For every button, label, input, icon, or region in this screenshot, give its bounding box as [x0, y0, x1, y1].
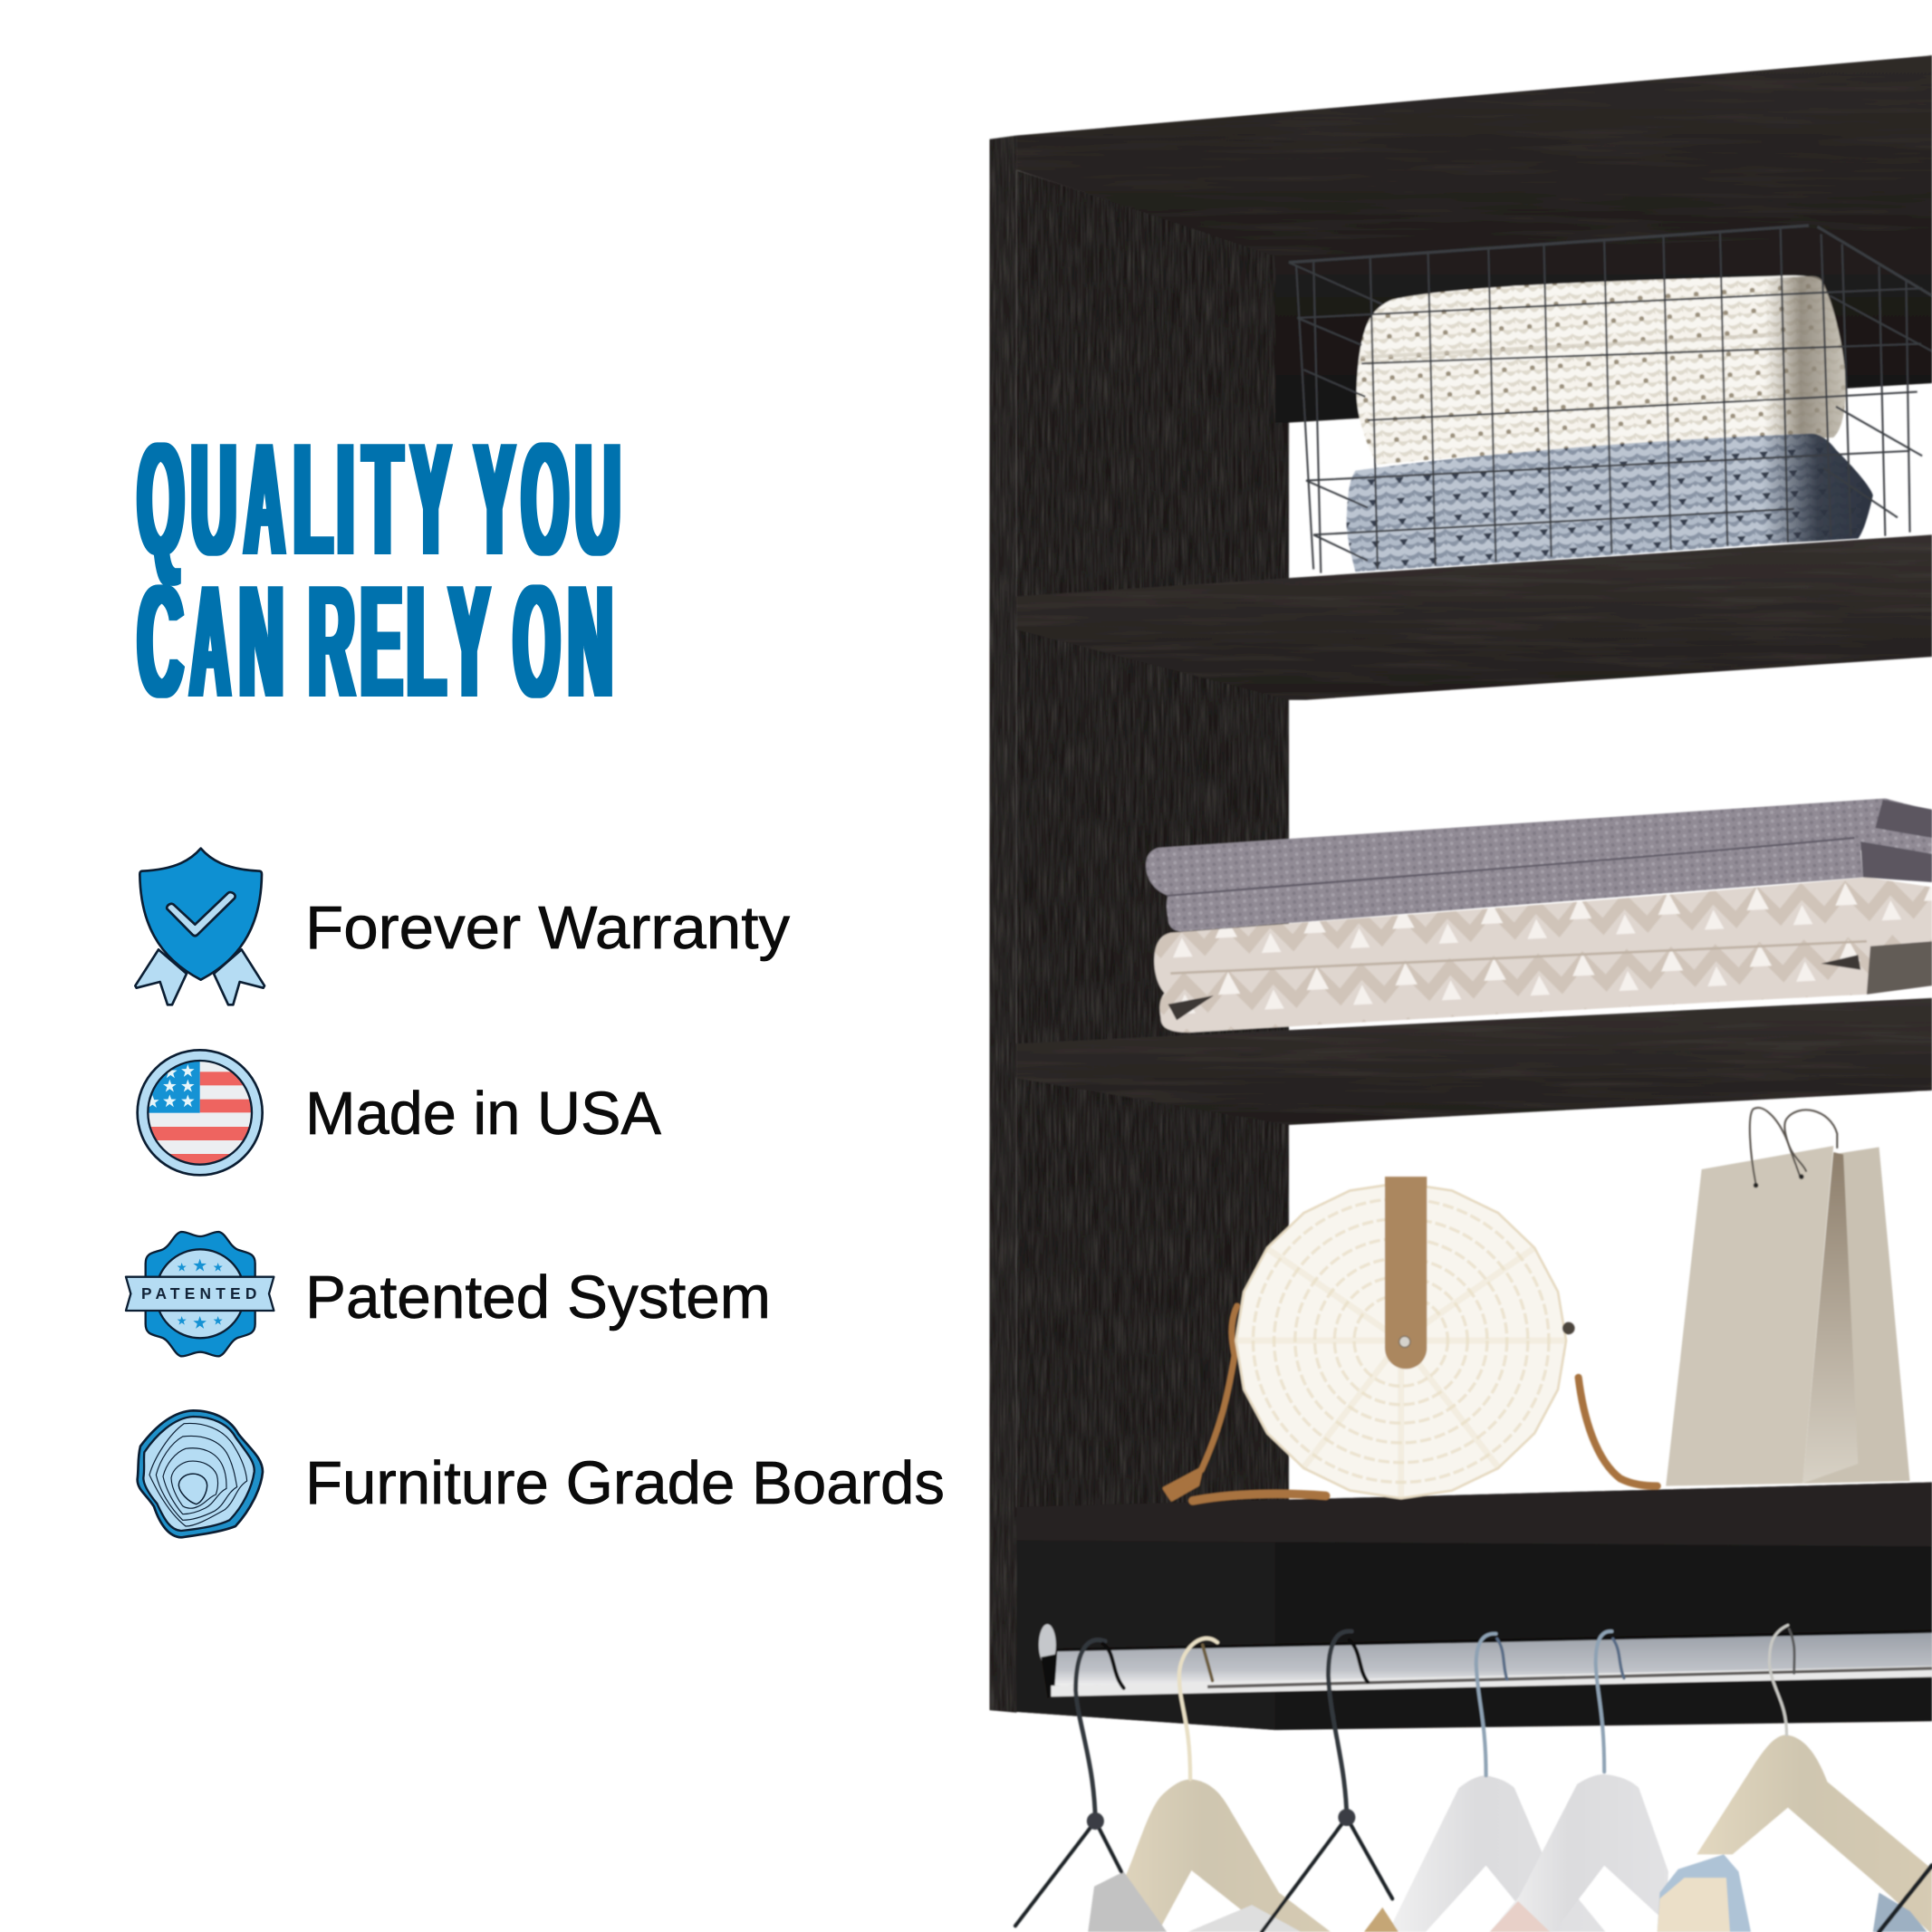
icon: patented badge — [126, 1232, 274, 1356]
knit towel white — [1357, 275, 1846, 465]
black hooks — [1076, 1631, 1368, 1821]
title: L — [293, 409, 332, 589]
text: Forever Warranty: Forever Warranty — [305, 894, 791, 962]
left upright — [989, 136, 1016, 1713]
beige blanket — [1154, 878, 1932, 1033]
title: N — [239, 552, 284, 731]
gray blanket — [1146, 798, 1932, 931]
top board and back rail — [1016, 55, 1932, 423]
title: I — [337, 409, 354, 589]
icon: warranty shield — [135, 849, 264, 1004]
title: O — [514, 552, 560, 731]
title: Y — [411, 409, 449, 589]
wire basket — [1289, 226, 1932, 573]
title: L — [407, 552, 446, 731]
knit towel blue — [1347, 434, 1873, 572]
rivet — [1399, 1336, 1410, 1348]
wicker bag — [1165, 1177, 1658, 1501]
text: Made in USA: Made in USA — [305, 1080, 661, 1148]
blue hooks — [1476, 1631, 1624, 1775]
title: E — [360, 552, 402, 731]
tan garment — [1364, 1908, 1399, 1932]
title: T — [363, 409, 402, 589]
title: O — [522, 409, 569, 589]
title: A — [190, 552, 230, 731]
icon: USA flag — [138, 1050, 263, 1175]
shelf two — [1016, 998, 1932, 1125]
silver hook — [1769, 1625, 1788, 1735]
beige hanger — [1101, 1779, 1331, 1932]
gray garment — [1088, 1871, 1167, 1932]
white garment — [1187, 1905, 1302, 1932]
title: A — [245, 409, 284, 589]
text: U — [575, 409, 620, 589]
title: Q — [138, 409, 184, 589]
beige hook — [1179, 1639, 1217, 1779]
photo: wall closet shelving unit — [989, 55, 1932, 1932]
icon: wood rings — [138, 1410, 263, 1537]
text: Furniture Grade Boards: Furniture Grade Boards — [305, 1449, 945, 1517]
knots — [1087, 1809, 1355, 1830]
white hanger one — [1374, 1775, 1606, 1932]
hangers — [1015, 1625, 1932, 1932]
side panel — [1016, 170, 1289, 1522]
text: Patented System: Patented System — [305, 1264, 771, 1331]
title: Y — [475, 409, 514, 589]
title: C — [138, 552, 183, 731]
title: R — [308, 552, 355, 731]
title: U — [191, 409, 236, 589]
black hanger wires — [1015, 1817, 1932, 1932]
bag straps — [1165, 1306, 1658, 1501]
shelf one — [1016, 534, 1932, 700]
wood hanger — [1697, 1735, 1932, 1932]
white hanger two — [1490, 1774, 1668, 1932]
wicker body — [1235, 1183, 1566, 1498]
paper bag — [1666, 1108, 1910, 1486]
blue garment strap — [1658, 1854, 1927, 1932]
text: N — [568, 552, 612, 731]
title — [138, 409, 620, 731]
closet rod — [1039, 1624, 1932, 1698]
icon: patented badge: PATENTED — [141, 1284, 256, 1302]
lower board with back panel — [992, 1482, 1932, 1730]
pink garment — [1490, 1901, 1550, 1932]
title: Y — [449, 552, 488, 731]
leather tab — [1385, 1177, 1427, 1369]
